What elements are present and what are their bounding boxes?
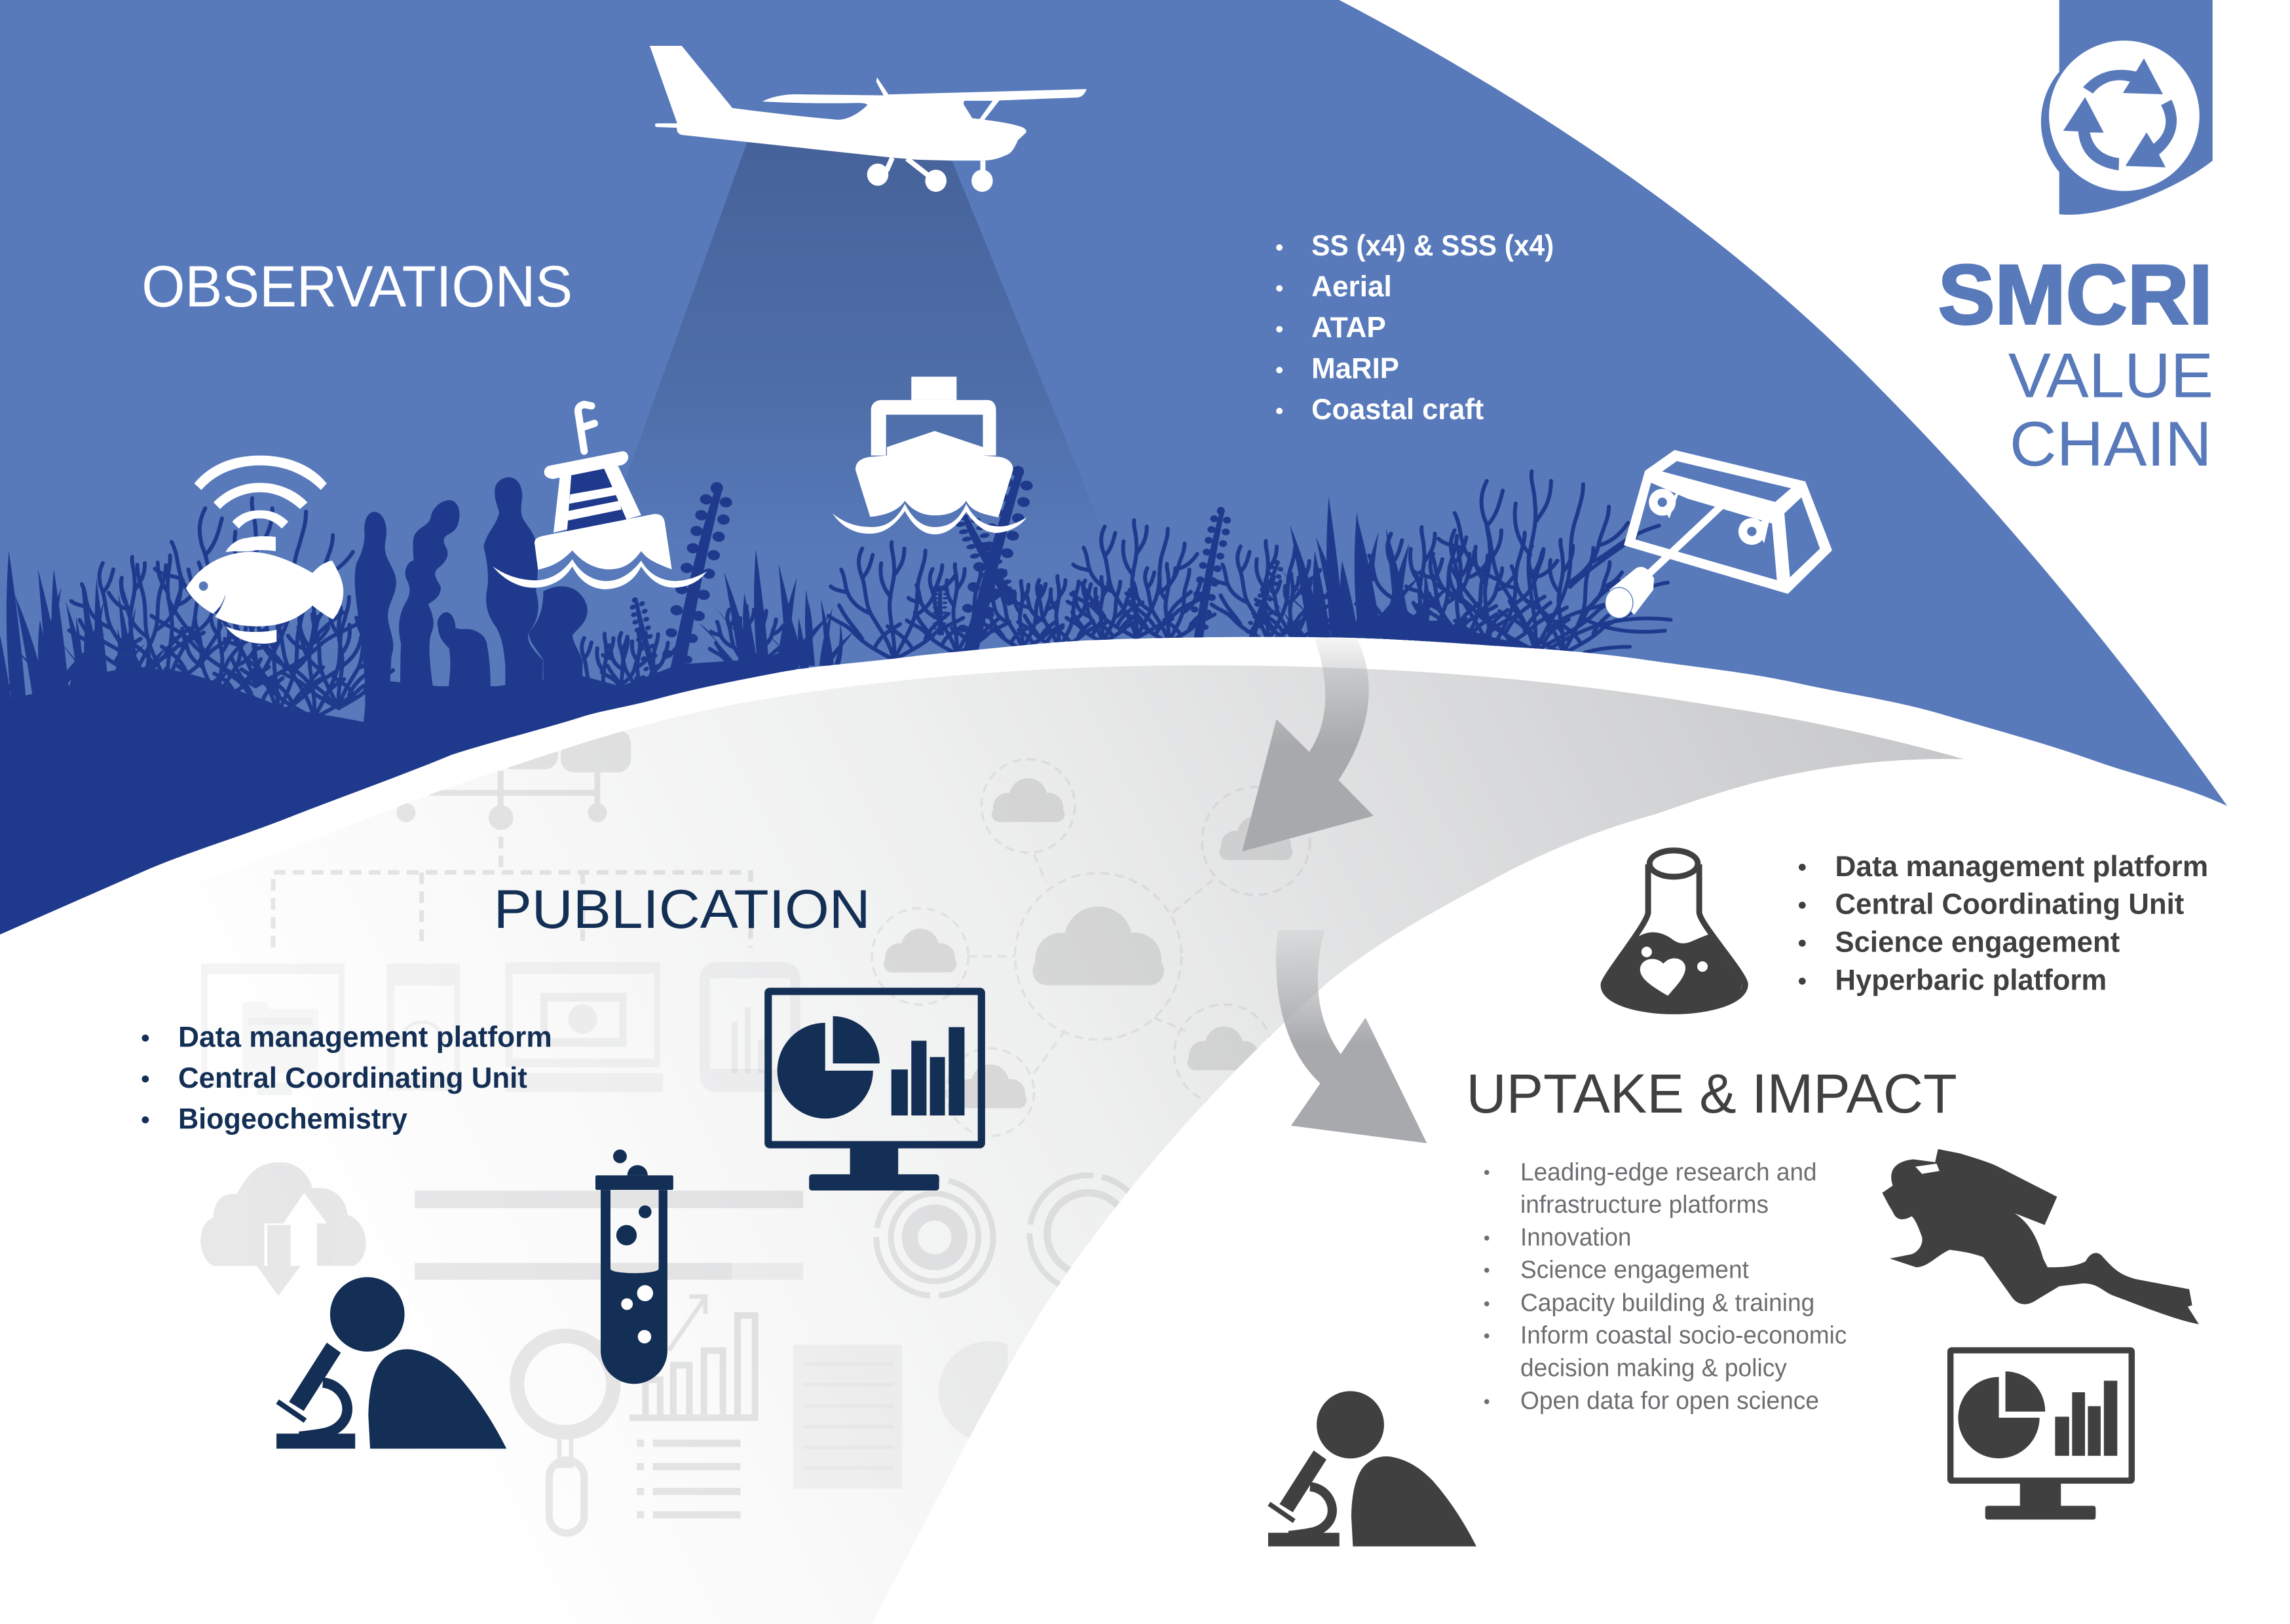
icon: tagged fish	[186, 456, 343, 644]
icon: dark data monitor	[1951, 1350, 2131, 1520]
arrow: observations to publication	[1242, 638, 1374, 851]
list: impact outcomes: Science engagement	[1520, 1257, 1749, 1284]
faded document	[793, 1344, 902, 1488]
title: SMCRI value chain: CHAIN	[2010, 409, 2212, 479]
faded upload cloud	[200, 1162, 366, 1296]
list: impact outcomes: Open data for open science	[1520, 1388, 1819, 1415]
list: impact outcomes	[1484, 1158, 1847, 1415]
list: observation platforms: ATAP	[1311, 312, 1386, 344]
survey beam under aeroplane	[606, 140, 1121, 577]
list: impact outcomes: Innovation	[1520, 1224, 1631, 1251]
icon: scientist at microscope	[277, 1278, 505, 1448]
icon: scuba diver	[1882, 1149, 2199, 1324]
list: observation platforms: MaRIP	[1311, 352, 1399, 384]
logo: recycling value-chain badge	[2041, 0, 2213, 215]
list: uptake platforms	[1799, 851, 2208, 997]
list: observation platforms: SS (x4) & SSS (x4)	[1311, 230, 1554, 262]
title: SMCRI value chain: SMCRI	[1938, 248, 2213, 342]
list: impact outcomes: infrastructure platforms	[1520, 1191, 1769, 1219]
list: uptake platforms: Data management platform	[1835, 851, 2208, 883]
panel: publication background	[0, 665, 1964, 1624]
faded cloud nodes	[872, 759, 1310, 1438]
faded network diagram	[273, 730, 751, 948]
seabed vegetation silhouette	[0, 461, 1671, 964]
list: impact outcomes: Inform coastal socio-economic	[1520, 1322, 1847, 1350]
icon: test tube	[595, 1149, 673, 1384]
list: impact outcomes: Capacity building & training	[1520, 1289, 1814, 1317]
faded background icons	[200, 730, 1310, 1533]
list: impact outcomes: Leading-edge research and	[1520, 1158, 1817, 1186]
heading: uptake and impact: UPTAKE & IMPACT	[1467, 1062, 1957, 1124]
heading: observations: OBSERVATIONS	[141, 253, 572, 319]
faded text lines	[637, 1439, 740, 1519]
icon: buoy	[493, 405, 707, 589]
faded magnifier	[517, 1336, 613, 1533]
list: uptake platforms: Science engagement	[1835, 927, 2120, 959]
icon: dark scientist at microscope	[1269, 1392, 1475, 1545]
icon: data monitor	[768, 991, 981, 1190]
faded rings	[876, 1175, 1146, 1296]
list: publication activities: Central Coordinating Unit	[178, 1062, 527, 1094]
faded device contents	[242, 993, 764, 1073]
list: observation platforms	[1276, 230, 1554, 426]
arrow: publication to uptake	[1276, 930, 1427, 1143]
list: uptake platforms: Hyperbaric platform	[1835, 965, 2107, 997]
title: SMCRI value chain: VALUE	[2008, 341, 2213, 411]
icon: underwater glider	[1605, 451, 1831, 618]
list: publication activities: Biogeochemistry	[178, 1103, 407, 1135]
list: impact outcomes: decision making & policy	[1520, 1355, 1787, 1382]
icon: flask with heart	[1604, 851, 1745, 1011]
panel: observations background	[0, 0, 2227, 934]
icon: research vessel	[833, 377, 1026, 534]
heading: publication: PUBLICATION	[494, 878, 871, 940]
title: SMCRI value chain	[1938, 248, 2213, 479]
icon: aeroplane	[650, 46, 1087, 192]
faded chart	[629, 1297, 755, 1418]
list: publication activities: Data management platform	[178, 1022, 552, 1054]
faded progress bars	[415, 1190, 803, 1280]
list: uptake platforms: Central Coordinating Unit	[1835, 889, 2185, 921]
list: publication activities	[141, 1022, 552, 1135]
faded device icons	[201, 962, 800, 1095]
list: observation platforms: Aerial	[1311, 271, 1392, 303]
list: observation platforms: Coastal craft	[1311, 394, 1484, 426]
